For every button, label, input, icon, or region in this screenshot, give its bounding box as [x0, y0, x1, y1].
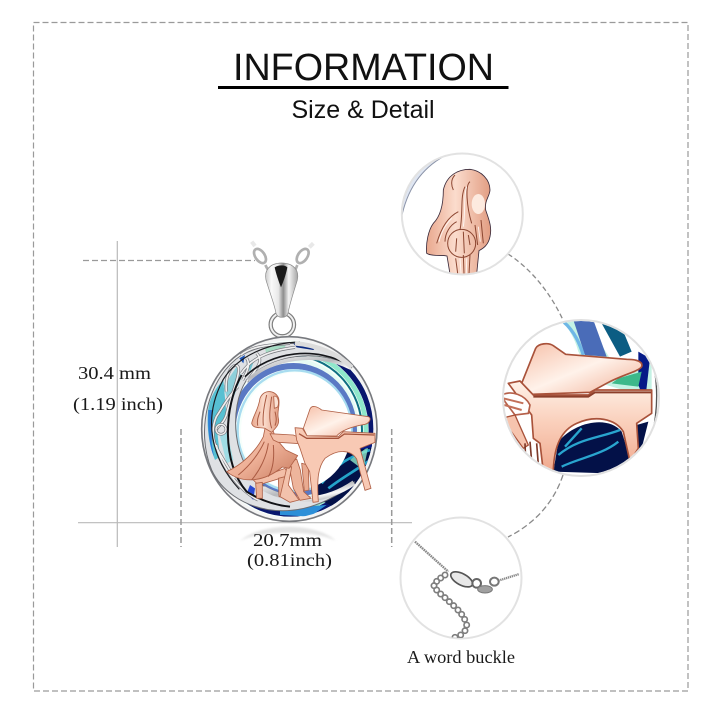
necklace chain [415, 542, 448, 572]
rear piano leg [302, 463, 309, 491]
extender chain [431, 572, 469, 640]
bail [266, 263, 298, 317]
detail circle: piano [502, 320, 659, 476]
pendant reflection [240, 527, 336, 541]
legs and hands [502, 393, 530, 415]
pendant illustration [202, 242, 377, 521]
hair and face [252, 392, 279, 432]
height label: 30.4 mm [78, 363, 151, 383]
silver crescent [204, 342, 355, 511]
dress [227, 428, 298, 480]
connector: piano to buckle [508, 475, 563, 537]
width dimension lines [78, 429, 412, 547]
lower right dark crystal [318, 445, 372, 506]
piano lid [522, 344, 642, 394]
width label [247, 530, 332, 571]
connector: figure to piano [508, 254, 563, 320]
crescent rims [212, 342, 354, 507]
piano lid [303, 406, 370, 436]
height label: (1.19 inch) [73, 394, 163, 415]
height dimension lines [83, 241, 255, 547]
crystal inlays [208, 343, 317, 500]
crystal background [565, 321, 652, 390]
stool [253, 468, 289, 498]
subtitle: Size & Detail [292, 96, 435, 124]
celtic knots [213, 343, 295, 500]
arm [270, 434, 307, 447]
outer ring [202, 337, 377, 521]
white centre [241, 372, 351, 490]
detail circle: figure hair [402, 150, 523, 274]
height label [73, 363, 163, 415]
necklace chain [252, 242, 313, 275]
width label: 20.7mm [253, 530, 322, 550]
piano body [508, 381, 652, 472]
piano body [295, 428, 375, 502]
title: INFORMATION [233, 47, 494, 89]
detail circle: clasp [400, 518, 522, 640]
rose gold woman and piano [227, 392, 375, 502]
width label: (0.81inch) [247, 550, 332, 571]
crystal ring [236, 340, 374, 518]
legs [280, 459, 311, 502]
lobster clasp [448, 569, 499, 593]
clasp caption: A word buckle [407, 647, 515, 667]
hair shape [426, 169, 491, 274]
jump ring [271, 313, 294, 336]
